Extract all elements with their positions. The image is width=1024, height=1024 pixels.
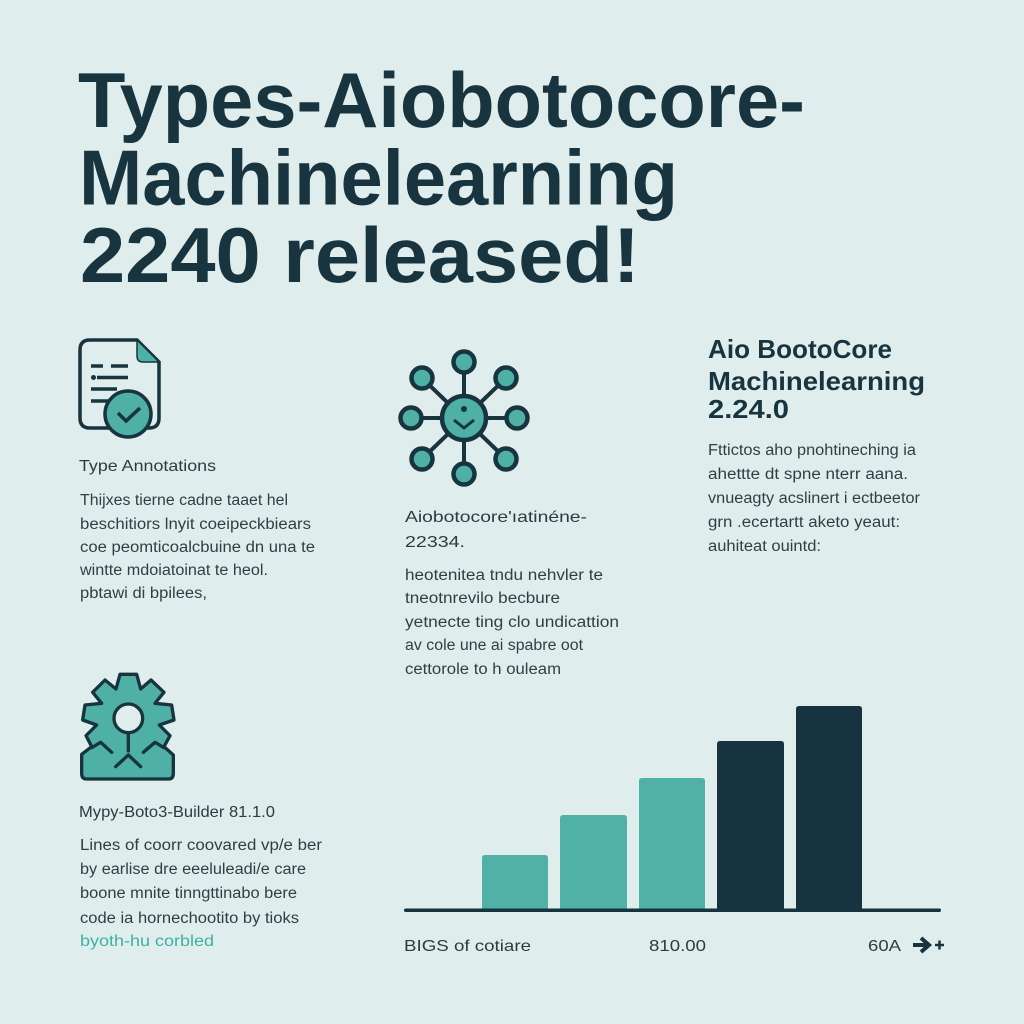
title: Machinelearning	[79, 134, 678, 222]
bar 4	[717, 741, 784, 909]
text block: type annotations	[79, 492, 315, 602]
bar 5	[796, 706, 862, 909]
heading: version: Machinelearning	[708, 366, 925, 396]
text block: version: auhiteat ouintd:	[708, 538, 821, 555]
axis label left: BIGS of cotiare	[404, 938, 531, 955]
arrow with plus	[913, 938, 944, 952]
text block: mypy builder: boone mnite tinngttinabo bere	[80, 885, 297, 902]
bar 2	[560, 815, 627, 909]
bar chart	[404, 706, 944, 955]
text block: version: ahettte dt spne nterr aana.	[708, 466, 908, 483]
text block: type annotations: beschitiors lnyit coeipeckbiears	[80, 516, 311, 533]
text block: aiobotocore	[405, 567, 619, 678]
text block: version: grn .ecertartt aketo yeaut:	[708, 514, 900, 531]
panel: mypy builder	[79, 674, 322, 950]
heading: mypy builder: Mypy-Boto3-Builder 81.1.0	[79, 804, 275, 821]
text block: mypy builder: by earlise dre eeeluleadi/e care	[80, 861, 306, 878]
icon: network hub	[400, 352, 528, 484]
axis label right: 60A	[868, 938, 901, 955]
panel: aiobotocore	[400, 352, 619, 678]
heading: version: 2.24.0	[708, 394, 789, 424]
text block: mypy builder: byoth-hu corbled	[80, 933, 214, 950]
text block: aiobotocore: tneotnrevilo becbure	[405, 590, 560, 607]
icon: document with check	[80, 340, 159, 437]
panel: type annotations	[79, 340, 315, 602]
text block: aiobotocore: av cole une ai spabre oot	[405, 637, 584, 654]
text block: type annotations: Thijxes tierne cadne taaet hel	[80, 492, 288, 509]
heading: version	[708, 334, 925, 424]
text block: mypy builder: Lines of coorr coovared vp/e ber	[80, 837, 322, 854]
text block: type annotations: coe peomticoalcbuine dn una te	[80, 539, 315, 556]
chart axis	[404, 908, 941, 912]
text block: version: Fttictos aho pnohtineching ia	[708, 442, 916, 459]
text block: version	[708, 442, 920, 555]
bar 3	[639, 778, 705, 909]
heading: aiobotocore	[405, 509, 587, 551]
text block: mypy builder	[80, 837, 322, 950]
heading: aiobotocore: Aiobotocore'ıatinéne-	[405, 509, 587, 526]
axis label middle: 810.00	[649, 938, 706, 955]
title: 2240 released!	[80, 211, 640, 299]
text block: mypy builder: code ia hornechootito by tioks	[80, 910, 299, 927]
panel: version	[708, 334, 925, 555]
text block: aiobotocore: yetnecte ting clo undicattion	[405, 614, 619, 631]
text block: type annotations: wintte mdoiatoinat te heol.	[79, 562, 268, 579]
title: Types-Aiobotocore-	[78, 56, 805, 144]
text block: aiobotocore: heotenitea tndu nehvler te	[405, 567, 603, 584]
heading: aiobotocore: 22334.	[405, 534, 465, 551]
heading: type annotations: Type Annotations	[79, 458, 216, 475]
text block: aiobotocore: cettorole to h ouleam	[405, 661, 561, 678]
heading: version: Aio BootoCore	[708, 334, 892, 364]
bar 1	[482, 855, 548, 909]
icon: gear	[82, 674, 174, 779]
text block: version: vnueagty acslinert i ectbeetor	[708, 490, 920, 507]
text block: type annotations: pbtawi di bpilees,	[80, 585, 207, 602]
title	[78, 56, 805, 299]
